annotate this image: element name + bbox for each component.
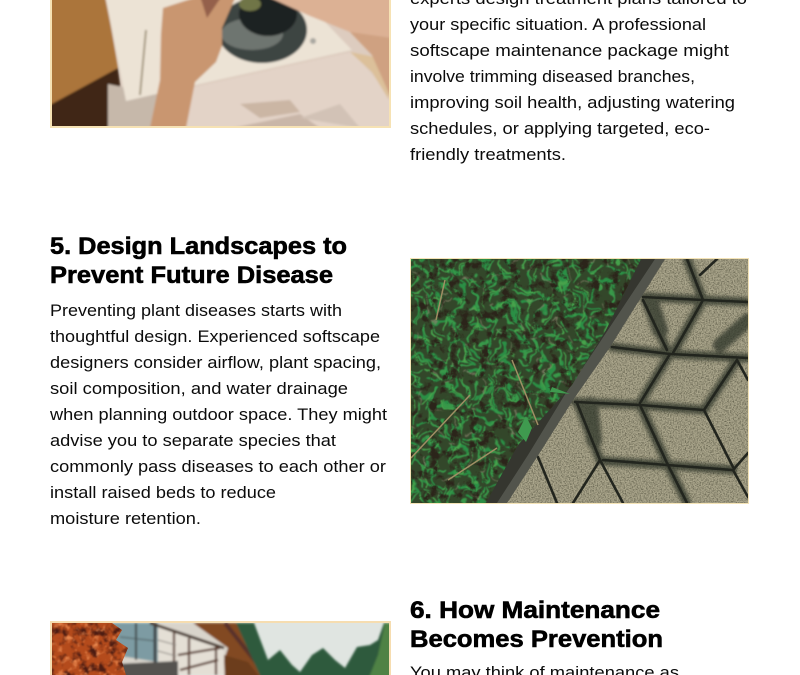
heading: section 5: 5. Design Landscapes to	[50, 233, 347, 260]
paragraph: thoughtful design: moisture retention.	[50, 509, 201, 528]
window	[108, 623, 158, 662]
stone mortar	[217, 0, 307, 63]
paper	[105, 0, 352, 101]
heading: section 5	[50, 233, 347, 289]
right hand	[266, 0, 392, 100]
paragraph: tailored treatment plans: schedules, or applying targeted, eco-	[410, 119, 710, 138]
paragraph: thoughtful design: advise you to separate species that	[50, 431, 336, 450]
paragraph: thoughtful design: commonly pass diseases to each other or	[50, 457, 386, 476]
paragraph: thoughtful design: Preventing plant diseases starts with	[50, 301, 342, 320]
paragraph: tailored treatment plans: your specific situation. A professional	[410, 15, 706, 34]
photo: autumn tree and modern house with balcony	[50, 621, 392, 675]
roof	[193, 623, 270, 675]
heading: section 6: 6. How Maintenance	[410, 597, 660, 624]
photo: grass beside geometric paving stones	[405, 253, 749, 510]
paragraph: thoughtful design: designers consider airflow, plant spacing,	[50, 353, 381, 372]
paragraph: thoughtful design: thoughtful design. Experienced softscape	[50, 327, 380, 346]
heading: section 6	[410, 597, 663, 653]
photo: hands grinding herbs in a stone mortar	[48, 0, 395, 130]
balcony	[158, 623, 224, 675]
brown wood	[48, 0, 118, 108]
left hand	[150, 0, 236, 128]
paragraph: tailored treatment plans: friendly treatments.	[410, 145, 566, 164]
paragraph: tailored treatment plans	[410, 0, 747, 164]
paragraph: tailored treatment plans: softscape maintenance package might	[410, 41, 729, 60]
paragraph: thoughtful design: install raised beds to reduce	[50, 483, 276, 502]
mortar shadows	[575, 259, 748, 503]
paragraph: tailored treatment plans: improving soil health, adjusting watering	[410, 93, 735, 112]
wall	[118, 623, 262, 675]
paragraph: thoughtful design: when planning outdoor space. They might	[49, 405, 387, 424]
grass	[411, 259, 641, 503]
curb	[478, 259, 665, 503]
mortar joints	[538, 259, 748, 503]
paragraph: thoughtful design	[49, 301, 387, 528]
heading: section 6: Becomes Prevention	[410, 626, 663, 653]
herbs	[239, 0, 261, 11]
paragraph: tailored treatment plans: involve trimming diseased branches,	[410, 67, 695, 86]
conifers	[236, 623, 392, 675]
paving	[411, 259, 748, 503]
heading: section 5: Prevent Future Disease	[50, 262, 333, 289]
autumn tree	[50, 623, 130, 675]
paragraph: thoughtful design: soil composition, and water drainage	[50, 379, 348, 398]
white cloth	[185, 52, 395, 130]
